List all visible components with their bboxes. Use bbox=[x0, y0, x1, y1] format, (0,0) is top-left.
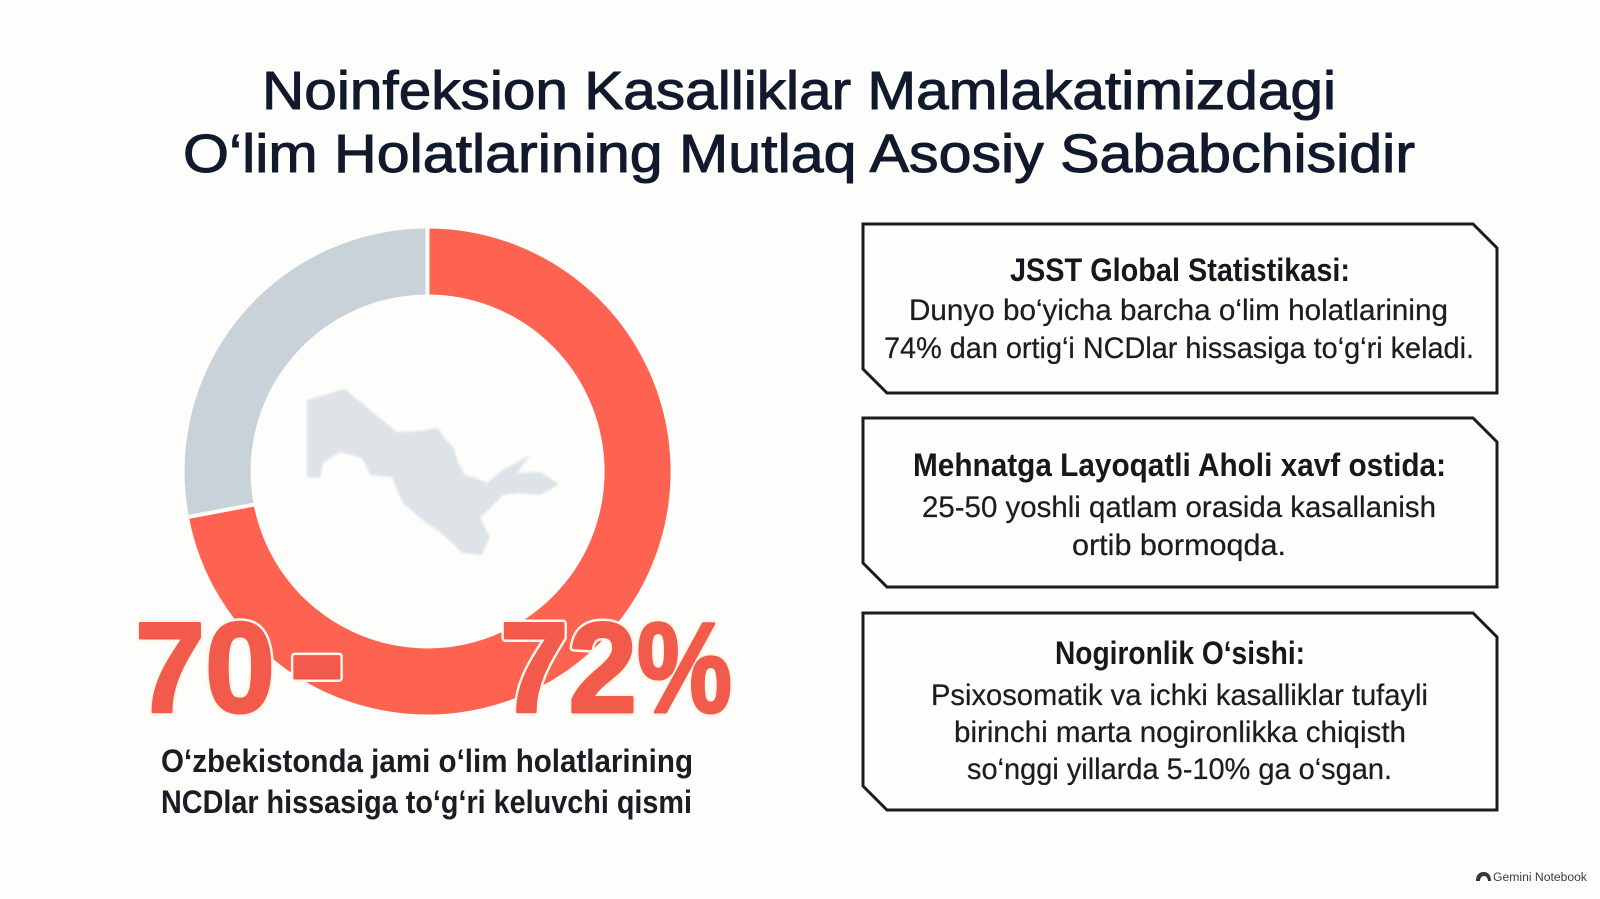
body text: Psixosomatik va ichki kasalliklar tufayli bbox=[931, 679, 1428, 712]
heading: Nogironlik O‘sishi: bbox=[1055, 635, 1305, 671]
donut chart bbox=[188, 227, 638, 682]
body text bbox=[884, 294, 1474, 365]
big number 70-72%: % bbox=[637, 597, 732, 740]
panel: working-age population bbox=[863, 418, 1497, 587]
icon: notebook logo bbox=[1476, 872, 1491, 881]
big number 70-72%: % bbox=[637, 597, 732, 740]
body text: 25-50 yoshli qatlam orasida kasallanish bbox=[922, 491, 1436, 524]
body text bbox=[931, 679, 1428, 786]
body text: birinchi marta nogironlikka chiqisth bbox=[954, 716, 1406, 749]
segment divider top bbox=[426, 227, 430, 296]
title bbox=[183, 61, 1415, 184]
caption bbox=[161, 743, 693, 820]
title: O‘lim Holatlarining Mutlaq Asosiy Sababchisidir bbox=[183, 124, 1415, 184]
segment: 72% NCD share bbox=[221, 261, 638, 682]
big number 70-72%: - bbox=[288, 552, 346, 753]
big number 70-72% bbox=[135, 552, 732, 753]
body text: 74% dan ortig‘i NCDlar hissasiga to‘g‘ri keladi. bbox=[884, 332, 1474, 365]
panel: JSST global statistics bbox=[863, 224, 1497, 393]
big number 70-72%: - bbox=[288, 552, 346, 753]
heading: Mehnatga Layoqatli Aholi xavf ostida: bbox=[913, 447, 1446, 483]
body text: Dunyo bo‘yicha barcha o‘lim holatlarining bbox=[909, 294, 1448, 327]
big number 70-72%: 72 bbox=[500, 597, 637, 740]
caption: O‘zbekistonda jami o‘lim holatlarining bbox=[161, 743, 693, 779]
heading: JSST Global Statistikasi: bbox=[1010, 252, 1350, 288]
body text: ortib bormoqda. bbox=[1072, 529, 1286, 562]
watermark: Gemini Notebook bbox=[1493, 872, 1587, 884]
big number 70-72%: 72 bbox=[500, 597, 637, 740]
segment divider left bbox=[188, 504, 255, 517]
body text bbox=[922, 491, 1436, 562]
panel: disability growth bbox=[863, 613, 1497, 810]
big number 70-72%: 70 bbox=[135, 597, 275, 740]
big number 70-72%: 70 bbox=[135, 597, 275, 740]
icon: map of Uzbekistan bbox=[307, 389, 559, 555]
title: Noinfeksion Kasalliklar Mamlakatimizdagi bbox=[262, 61, 1336, 121]
segment: remaining share bbox=[218, 262, 428, 511]
body text: so‘nggi yillarda 5-10% ga o‘sgan. bbox=[967, 753, 1392, 786]
caption: NCDlar hissasiga to‘g‘ri keluvchi qismi bbox=[161, 784, 692, 820]
